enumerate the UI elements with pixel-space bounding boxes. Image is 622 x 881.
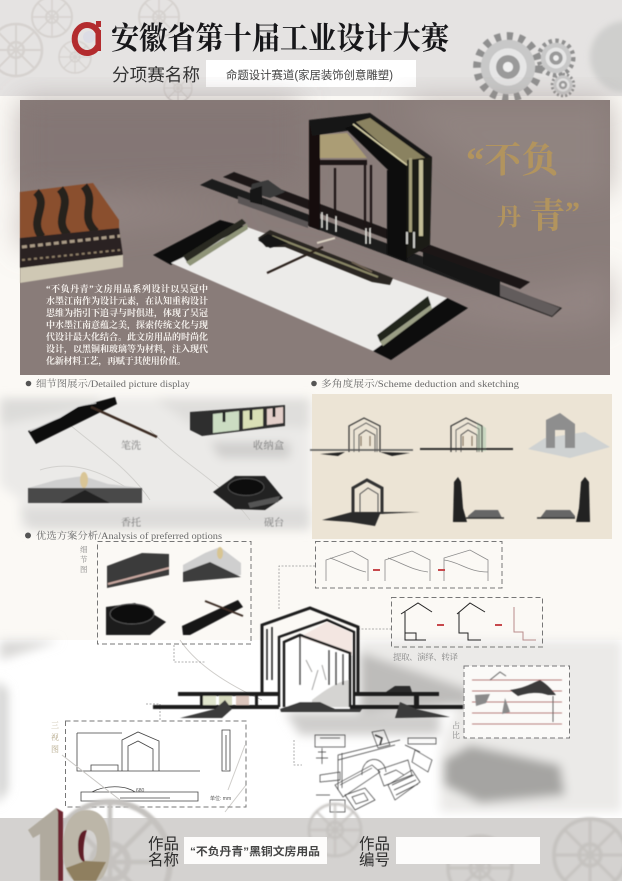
right columns: [387, 170, 407, 262]
view 2: [420, 418, 513, 452]
label: 占比: 比: [452, 730, 460, 740]
base bars: [200, 172, 562, 317]
label: 三视图: 视: [51, 733, 59, 742]
panel: multi-angle views: [310, 394, 612, 539]
bamboo ink: [306, 660, 326, 690]
callout: three views: 单位: mm: [210, 795, 231, 802]
books: [20, 183, 123, 283]
title: gold slogan: 丹: [497, 204, 521, 231]
rear gold panel: [356, 118, 428, 166]
panel: footer: [0, 802, 622, 881]
item: incense holder: 香托: [121, 516, 141, 529]
description text: 设计，以黑铜和玻璃等为材料，注入现代: [46, 343, 208, 355]
panel: detail pictures: [0, 397, 310, 530]
panel: header band: [0, 0, 622, 102]
callout: detail views dashed box: [80, 542, 251, 644]
title: gold slogan: ”: [565, 196, 580, 229]
item: storage box: 收纳盒: [253, 439, 284, 452]
item: ink stone: [213, 476, 284, 529]
description text: 化新材料工艺，再赋于其使用价值。: [46, 355, 186, 367]
pavilion tints: [300, 622, 352, 655]
description text: [46, 283, 208, 367]
view 6: [537, 477, 590, 522]
view 1: [310, 418, 413, 456]
footer gears: [50, 802, 622, 881]
heading: detail pictures: 细节图展示/Detailed picture display: [36, 378, 190, 390]
subtitle value box: 命题设计赛道(家居装饰创意雕塑): [226, 68, 393, 82]
label: 三视图: 三: [51, 721, 59, 730]
right front band: [345, 126, 410, 180]
item: incense holder: [28, 472, 142, 529]
title: gold slogan: “不负: [466, 140, 559, 180]
exploded structure drawing: [315, 730, 436, 812]
connector lines: [146, 566, 391, 765]
view 4: [322, 480, 420, 526]
callout: proportion study: [464, 666, 570, 738]
item: storage box: [190, 405, 285, 452]
title: 安徽省第十届工业设计大赛: [111, 21, 452, 56]
label: work number: [359, 835, 390, 869]
item: ink stone: 砚台: [264, 516, 284, 529]
title: gold slogan: 青: [530, 197, 565, 236]
brush tray and pen: [258, 230, 393, 285]
drawers: [203, 696, 216, 705]
decorative clock gears left: [0, 0, 192, 102]
label: work name: 作品: [148, 835, 179, 853]
detail image 3: [106, 603, 166, 635]
gears right: [477, 21, 622, 98]
view 5: [453, 477, 504, 522]
description text: 思维为指引下追寻与时俱进，体现了吴冠: [46, 307, 208, 319]
pavilion gate: [309, 113, 432, 262]
emblem: number 10: [28, 808, 110, 881]
ink wash background: [0, 398, 310, 530]
hanging brushes: [335, 165, 371, 228]
left column: [309, 120, 320, 230]
callout: roof abstraction sketches: [392, 598, 542, 647]
front gold panel: [320, 133, 367, 158]
label: 细节图: 细: [80, 545, 88, 554]
description text: 水墨江南作为设计元素，在认知重构设计: [46, 295, 208, 307]
detail image 2: [183, 547, 241, 582]
label: 细节图: 节: [80, 554, 88, 564]
main elevation drawing: [153, 608, 463, 718]
subtitle label: 分项赛名称: [112, 65, 200, 85]
lower background: [0, 640, 622, 818]
title: gold slogan: [466, 140, 580, 236]
ground: [180, 700, 450, 718]
item: brush washer: 笔洗: [121, 439, 141, 452]
label: work name: [148, 835, 179, 869]
field: work name value: [184, 837, 327, 864]
callout: roof curve sketches: [316, 542, 502, 588]
label: work number: 编号: [359, 851, 390, 869]
bars: [153, 692, 463, 709]
detail image 4: [182, 600, 243, 635]
ink branches: [40, 425, 250, 520]
heading: multi-angle: 多角度展示/Scheme deduction and sketching: [321, 378, 519, 390]
detail image 1: [107, 553, 169, 588]
field: work number value: [396, 837, 540, 864]
label: work number: 作品: [359, 835, 390, 853]
description text: “不负丹青”文房用品系列设计以吴冠中: [46, 283, 208, 294]
heading: preferred options: 优选方案分析/Analysis of preferred options: [36, 530, 222, 542]
callout: three views: [51, 721, 246, 807]
logo: [75, 21, 101, 53]
field: work name value: “不负丹青”黑铜文房用品: [190, 844, 320, 858]
roof back: [309, 113, 432, 170]
label: 占比: 占: [452, 721, 460, 730]
label: work name: 名称: [148, 851, 179, 869]
description text: 中水墨江南意蕴之美，探索传统文化与现: [46, 319, 208, 331]
description text: 代设计最大化结合。此文房用品的时尚化: [46, 331, 208, 342]
label: 细节图: 图: [80, 565, 88, 574]
callout: three views: 680: [136, 788, 145, 794]
paper mat: [153, 219, 468, 360]
label: 三视图: 图: [51, 745, 59, 754]
frames: [262, 608, 358, 707]
item: brush washer: [28, 397, 157, 452]
view 3: [528, 413, 610, 458]
subtitle value box: [206, 60, 416, 87]
panel: hero photo: [20, 100, 610, 375]
caption: extraction: 提取、演绎、转译: [393, 652, 458, 662]
fabric folds: [20, 100, 610, 327]
